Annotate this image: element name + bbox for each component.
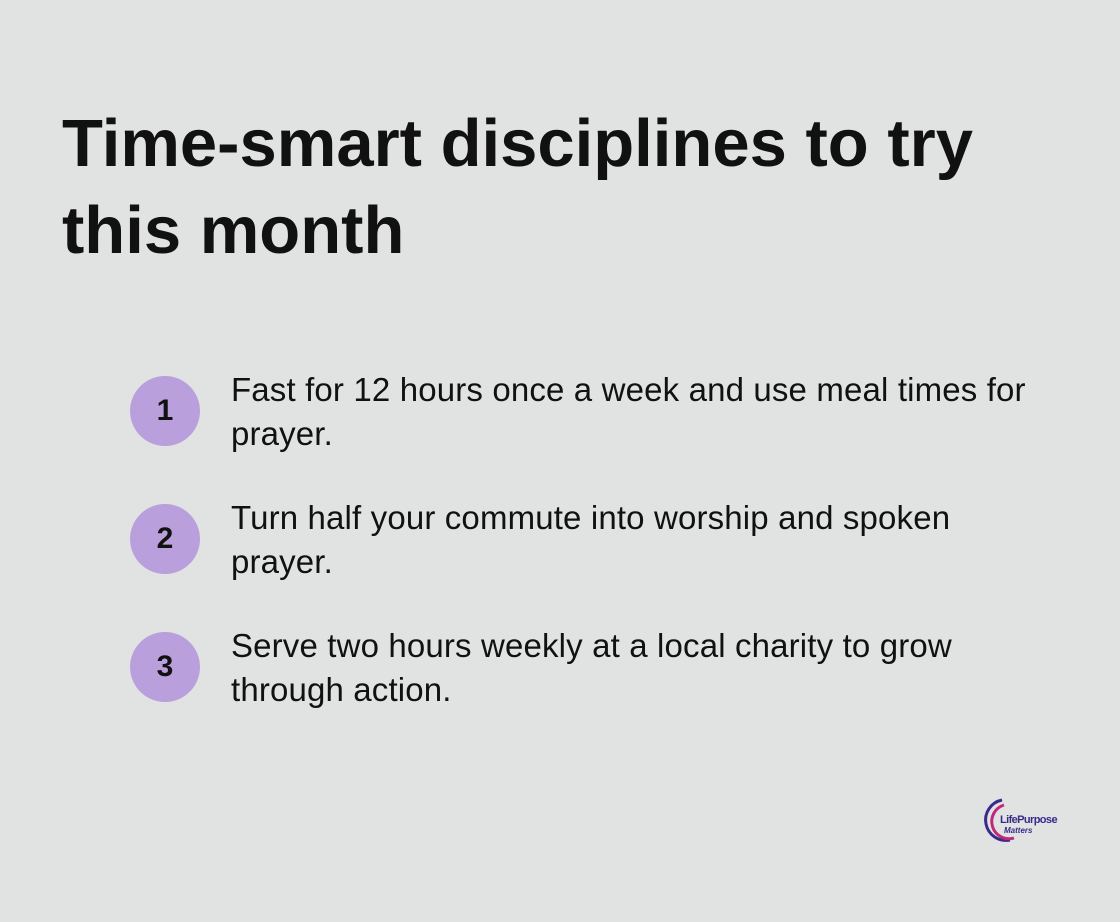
badge 1: 1: [157, 394, 173, 427]
text 3: Serve two hours weekly at a local charity to grow: [231, 627, 952, 664]
badge 3: [130, 632, 200, 702]
text 1: prayer.: [231, 415, 333, 452]
badge 3: 3: [157, 650, 173, 683]
text 3: [231, 627, 952, 708]
text 2: [231, 499, 950, 580]
item 1: [130, 371, 1026, 452]
logo: [984, 798, 1058, 842]
item 3: [130, 627, 952, 708]
text 3: through action.: [231, 671, 452, 708]
title: [62, 106, 973, 268]
logo: LifePurpose: [1000, 814, 1057, 826]
text 1: Fast for 12 hours once a week and use meal times for: [231, 371, 1026, 408]
title: Time-smart disciplines to try: [62, 106, 973, 181]
text 2: prayer.: [231, 543, 333, 580]
badge 1: [130, 376, 200, 446]
text 1: [231, 371, 1026, 452]
text 2: Turn half your commute into worship and spoken: [231, 499, 950, 536]
badge 2: 2: [157, 522, 173, 555]
badge 2: [130, 504, 200, 574]
title: this month: [62, 193, 404, 268]
logo: Matters: [1004, 826, 1033, 835]
item 2: [130, 499, 950, 580]
